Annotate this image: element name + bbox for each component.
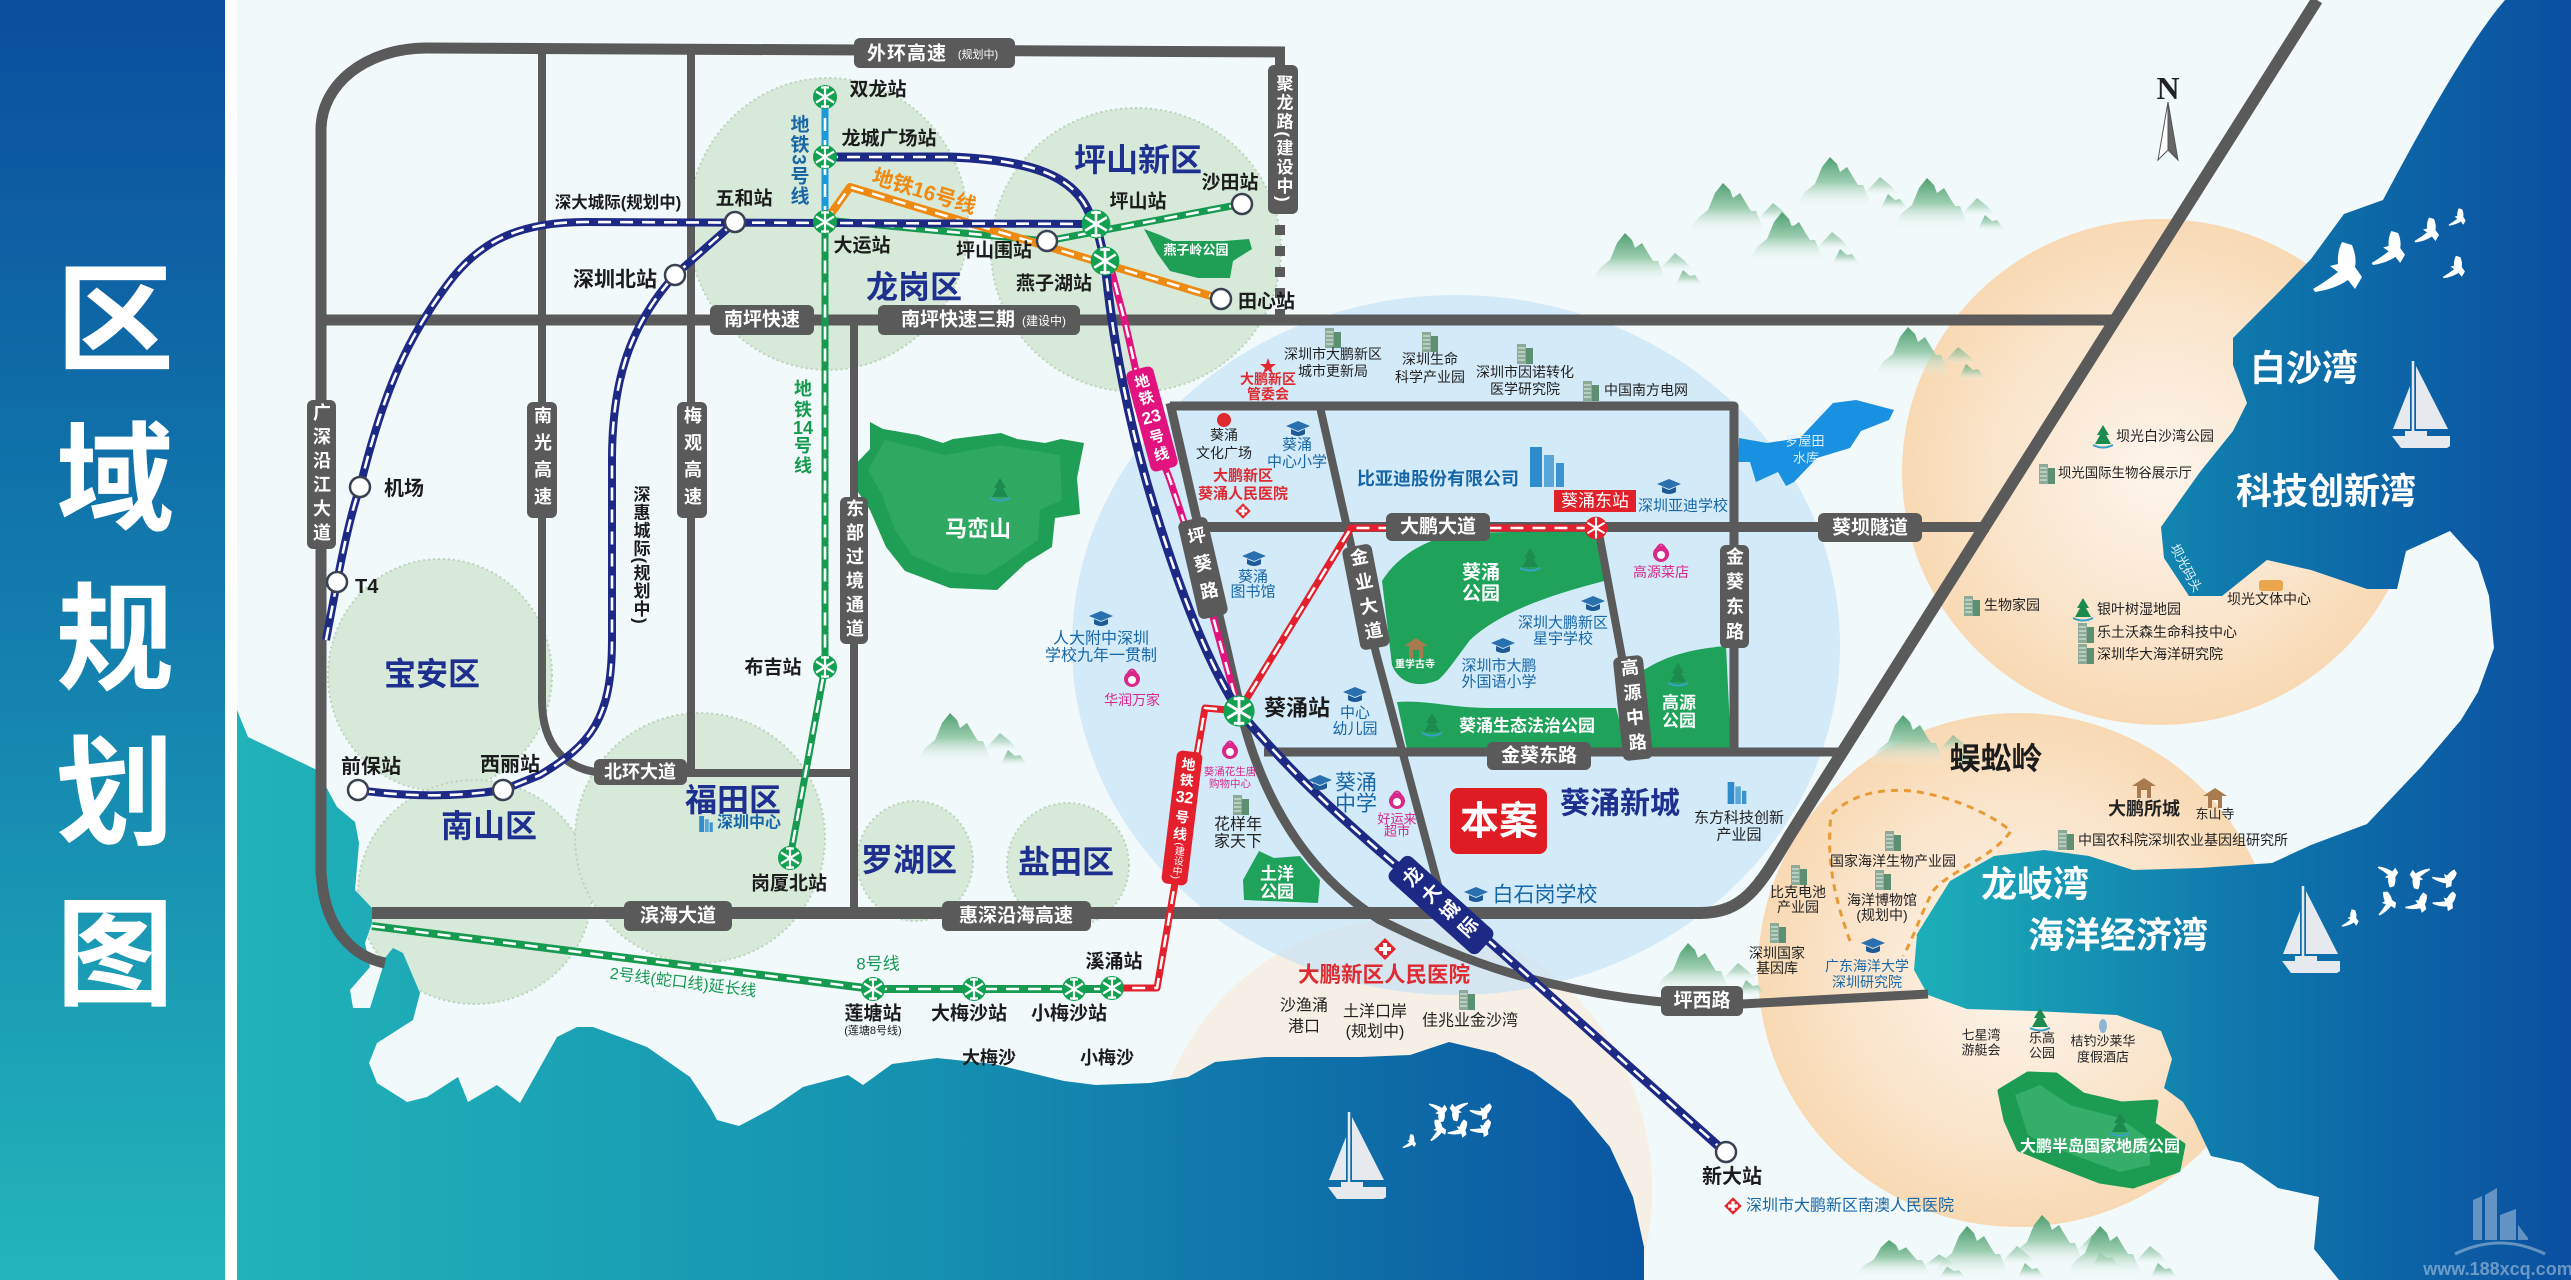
road: 坪葵路 [1177,516,1229,620]
POI: 银叶树湿地园: 银叶树湿地园 [2097,601,2181,617]
POI: 比克电池产业园: 产业园 [1777,899,1819,915]
POI: 坝光国际生物谷展示厅 [2039,464,2192,484]
road: 梅观高速: 梅观高速 [682,406,702,514]
road: 南光高速: 南光高速 [532,406,552,514]
sailboats [1328,361,2450,1199]
station names [341,78,1762,1188]
POI: 大鹏新区人民医院: 大鹏新区人民医院 [1298,962,1470,987]
road: 金葵东路 horizontal: 金葵东路 [1501,744,1577,766]
road network [321,0,2317,1004]
POI: 深圳亚迪学校: 深圳亚迪学校 [1638,498,1728,514]
POI: 乐土沃森生命科技中心: 乐土沃森生命科技中心 [2097,624,2237,640]
district names: 福田区 [685,782,781,818]
badge: 地铁32号线 [1161,750,1203,886]
POI: 管委会: 管委会 [1247,386,1289,402]
POI: 深圳华大海洋研究院 [2078,644,2223,664]
road: 大鹏大道: 大鹏大道 [1400,514,1476,538]
station names: 莲塘站 [844,1002,902,1024]
POI: 东方科技创新产业园 [1694,782,1784,844]
badge: 地铁32号线: 铁 [1179,771,1195,789]
POI: 中国农科院: 中国农科院深圳农业基因组研究所 [2078,832,2288,848]
POI: 乐高公园 [2029,1008,2055,1060]
road: 高源中路: 高源中路 [1618,656,1648,759]
road: 北环大道 [594,759,687,785]
POI: 葵涌中学 [1308,772,1377,816]
callout: 本案 [1450,788,1547,854]
POI: 因诺转化医学研究院 [1476,344,1574,397]
POI: 银叶树湿地园 [2073,598,2181,620]
POI: 沙渔涌港口: 港口 [1288,1018,1320,1036]
POI: 葵涌文化广场 [1196,413,1252,461]
line name: 地铁14号线: 地 [794,379,812,399]
line name: 地铁14号线: 铁 [794,400,812,420]
road: 南坪快速三期: (建设中) [1022,313,1066,328]
callout: 本案: 本案 [1460,800,1538,844]
white strip [225,0,237,1280]
station names: 小梅沙站 [1031,1002,1107,1024]
station names: 坪山围站 [956,240,1032,262]
POI: 高源菜店: 高源菜店 [1633,564,1689,580]
road: 广深沿江大道 [307,400,336,549]
bay titles: 龙岐湾 [1981,864,2089,904]
station names: 溪涌站 [1085,950,1143,972]
road labels [307,38,1922,1016]
POI: 葵涌中心小学 [1267,421,1327,470]
POI: 人大附中: 学校九年一贯制 [1045,646,1157,664]
station names: 田心站 [1238,290,1295,312]
park: 土洋公园 [1243,851,1320,903]
POI: 深圳市大鹏新区城市更新局: 深圳市大鹏新区 [1284,346,1382,362]
district circles [328,78,1281,1004]
POI: 中心幼儿园: 幼儿园 [1332,720,1378,738]
station names: 大梅沙站 [931,1002,1007,1024]
POI: 七星湾游艇会 [1961,1028,2001,1058]
district names: 南山区 [441,808,537,844]
POI: 大鹏所城: 大鹏所城 [2108,798,2180,819]
park: 高源公园: 公园 [1662,712,1696,730]
road: 南光高速 [527,402,557,518]
panel: title banner: 规 [56,575,174,707]
district names: 葵涌新城 [1560,788,1680,820]
line name: 深惠城际: 深惠城际(规划中) [630,485,650,625]
POI: 管委会: 大鹏新区 [1240,371,1296,387]
POI: 人大附中 [1045,611,1157,664]
POI: 深圳生命科学产业园: 深圳生命 [1402,351,1458,367]
station names: 新大站 [1702,1165,1762,1188]
POI: 比亚迪: 比亚迪股份有限公司 [1357,469,1519,489]
POI: 高源菜店 [1633,544,1689,580]
badge: 地铁23号线: 铁 [1137,388,1156,409]
POI: 深圳亚迪学校 [1638,479,1728,514]
POI: 土洋口岸 [1343,1002,1407,1040]
POI: 葵涌中学: 葵涌 [1335,772,1377,794]
park: 燕子岭公园: 燕子岭公园 [1163,242,1229,258]
road: 金葵东路 vertical [1720,545,1749,648]
line: 地铁14号线 [790,204,1242,858]
POI: 南澳人民医院: 深圳市大鹏新区南澳人民医院 [1746,1196,1954,1214]
line name: 深大城际: 深大城际(规划中) [555,192,681,212]
POIs: north row [1045,328,1784,1040]
zone: hospital peach area [1148,920,1652,1280]
reservoir: 罗屋田水库: 罗屋田 [1785,434,1825,448]
watermark [2422,1188,2571,1279]
POI: 深圳国家基因库 [1749,923,1805,976]
POI: 沙渔涌港口 [1280,996,1328,1036]
road: 葵坝隧道: 葵坝隧道 [1832,516,1908,538]
POI: 葵涌图书馆 [1230,551,1276,600]
station names: 西丽站 [480,753,540,776]
station names: 五和站 [715,188,773,210]
sailboat: 白沙湾 [2392,361,2450,448]
reservoir: 罗屋田水库 [1738,400,1894,486]
badge: 地铁23号线: 线 [1152,444,1171,465]
POI: 中心幼儿园: 中心 [1340,704,1370,722]
reservoir: 罗屋田水库: 水库 [1793,450,1819,466]
POI: 中国南方电网 [1583,381,1688,401]
bay titles: 科技创新湾 [2236,470,2416,512]
park: 马峦山: 马峦山 [945,516,1011,542]
compass: north arrow: N [2156,70,2180,106]
park: 高源公园 [1642,646,1731,749]
park: 土洋公园: 公园 [1260,882,1294,902]
park: 马峦山 [851,422,1084,590]
POI: 葵涌人民医院: 葵涌人民医院 [1198,484,1288,502]
POI: 七星湾游艇会: 游艇会 [1961,1042,2001,1058]
district names: 盐田区 [1018,844,1114,880]
line: 地铁23号线 [1109,261,1239,711]
station names: T4 [355,576,379,598]
district names: 罗湖区 [861,842,957,878]
POI: 桔钓沙莱华度假酒店: 桔钓沙莱华 [2070,1034,2136,1048]
POI: 坝光白沙湾公园 [2093,425,2214,448]
road: 坪西路 [1661,986,1743,1016]
POI: 深圳市大鹏新区城市更新局: 城市更新局 [1298,363,1368,379]
line name: 2号线延长线: 2号线(蛇口线)延长线 [609,965,757,1000]
POI: 桔钓沙莱华度假酒店 [2070,1019,2136,1064]
POI: 深圳中心: 深圳中心 [717,814,781,832]
POI: 大鹏新区人民医院 [1298,938,1470,987]
badge: 地铁32号线: 号 [1174,808,1190,826]
dashed boundary: 海洋产业区 [1830,790,2011,956]
POI: 星宇学校: 深圳大鹏新区 [1518,614,1608,632]
POI: 葵涌文化广场: 文化广场 [1196,445,1252,461]
POI: 葵涌图书馆: 图书馆 [1230,584,1276,600]
road: 坪西路: 坪西路 [1673,990,1731,1012]
POI: 比亚迪 [1357,447,1564,489]
label: 坝光码头: 坝光码头 [2167,542,2205,594]
panel: title banner: 图 [56,890,174,1022]
badge: 地铁23号线: 号 [1147,427,1166,448]
road: 葵坝隧道 [1818,513,1922,542]
POI: 葵涌花生唐: 购物中心 [1209,777,1251,790]
POI: 葵涌人民医院 [1198,466,1288,519]
POI: 深圳国家基因库: 深圳国家 [1749,945,1805,961]
line: 龙大城际 [825,157,1725,1152]
POI: 东山寺 [2195,788,2235,822]
road: 金葵东路 horizontal [1487,742,1591,770]
sailboat: south sea [1328,1112,1386,1199]
line name: 地铁14号线: 号 [794,436,812,456]
sea: west and south [237,710,1644,1280]
POI: 外国语小学 [1461,638,1537,690]
road: 外环高速: 外环高速 [867,42,947,64]
sea: east bays [1914,0,2571,1280]
line name: 地铁16号线: 地铁16号线 [869,165,979,219]
station names: 前保站 [341,755,401,778]
station names: 坪山站 [1109,190,1167,212]
POI: 广东海洋大学深圳研究院: 深圳研究院 [1832,974,1902,990]
badge: 地铁23号线 [1125,365,1179,473]
POI: 海洋博物馆: 海洋博物馆 [1847,892,1917,908]
POI: 土洋口岸: 土洋口岸 [1343,1002,1407,1020]
bay titles: 海洋经济湾 [2028,914,2208,956]
panel: title banner: 域 [56,415,174,547]
badge: 龙大城际 [1386,853,1496,957]
panel: title banner [0,0,225,1280]
POI: 花样年家天下 [1214,795,1262,850]
place name: 蜈蚣岭: 蜈蚣岭 [1950,742,2042,776]
POI: 外国语小学: 外国语小学 [1461,674,1537,690]
POI: 坝光文体中心: 坝光文体中心 [2227,591,2311,607]
line: 深大城际 [326,222,1096,640]
station names: 双龙站 [849,78,907,100]
POI: 华润万家 [1104,670,1160,708]
POI: 乐高公园: 公园 [2029,1046,2055,1060]
road: 南坪快速三期 [878,305,1080,335]
park: 大鹏半岛国家地质公园 [2000,1074,2183,1186]
line: 地铁16号线 [825,187,1221,299]
POI: 葵涌中心小学: 中心小学 [1267,454,1327,470]
park: 葵涌公园: 葵涌 [1462,562,1500,584]
POI: 比克电池产业园 [1770,865,1826,915]
road: 惠深沿海高速: 惠深沿海高速 [959,904,1073,926]
line: 深惠城际 [358,222,735,795]
mountains [915,157,2178,1279]
POI: 深圳生命科学产业园: 科学产业园 [1395,369,1465,385]
station names: 布吉站 [744,656,802,678]
POI: 海洋博物馆: (规划中) [1856,907,1908,923]
badge: 地铁32号线: 地 [1181,756,1197,773]
bay titles: 白沙湾 [2250,348,2358,388]
POI: 坝光白沙湾公园: 坝光白沙湾公园 [2116,428,2214,444]
metro station markers [778,85,1607,1001]
POI: 星宇学校: 星宇学校 [1533,630,1593,648]
station names: 沙田站 [1201,172,1259,194]
district names: 宝安区 [384,656,480,692]
road: 聚龙路 [1268,65,1298,214]
road: 广深沿江大道: 广深沿江大道 [311,403,331,547]
POI: 东方科技创新产业园: 产业园 [1716,826,1762,844]
metro badges [1125,365,1496,957]
park: 葵涌公园: 公园 [1462,584,1500,604]
POI: 花样年家天下: 花样年 [1214,816,1262,834]
park: 葵涌生态法治公园 [1397,702,1627,749]
road: 南坪快速三期: 南坪快速三期 [901,308,1015,330]
POI: 白石岗学校: 白石岗学校 [1492,884,1598,906]
district names: 坪山新区 [1074,142,1202,178]
POI: 因诺转化医学研究院: 医学研究院 [1490,381,1560,397]
POI: 好运来超市 [1377,792,1417,838]
road: 外环高速 [854,38,1015,68]
road: 坪葵路: 坪葵路 [1184,525,1222,611]
road: 东部过境通道: 东部过境通道 [844,498,864,643]
POI: 生物家园: 生物家园 [1984,597,2040,613]
POI: 中国南方电网: 中国南方电网 [1604,382,1688,398]
station names: 葵涌站 [1264,696,1330,720]
road: 惠深沿海高速 [942,901,1091,931]
line: 地铁3号线 [822,96,828,222]
POI: 葵涌文化广场: 葵涌 [1210,427,1238,443]
station names: 燕子湖站 [1016,272,1092,294]
park: 大鹏半岛国家地质公园: 大鹏半岛国家地质公园 [2020,1136,2180,1156]
station names: 岗厦北站 [751,872,827,894]
POI: 国家海洋生物产业园 [1830,831,1956,869]
zone: Longqi Bay peach circle [1758,713,2278,1227]
park: 葵涌公园 [1382,530,1604,684]
line: 地铁32号线 [1112,708,1239,988]
POI: 生物家园 [1964,596,2040,616]
POI: 深圳国家基因库: 基因库 [1756,960,1798,976]
park: 葵涌公园: 重学古寺 [1395,658,1435,670]
road: 南坪快速: 南坪快速 [724,308,800,330]
POI: 因诺转化医学研究院: 深圳市因诺转化 [1476,364,1574,380]
park: 葵涌生态法治公园: 葵涌生态法治公园 [1459,716,1595,736]
road: 滨海大道: 滨海大道 [640,904,716,926]
station names: 大运站 [833,234,891,256]
badge: 地铁32号线: (建设中) [1169,842,1185,880]
line name: 地铁14号线: 14 [793,418,813,438]
POI: 国家海洋生物产业园: 国家海洋生物产业园 [1830,853,1956,869]
road: 金业大道: 金业大道 [1346,545,1385,648]
watermark: www.188xcq.com [2422,1259,2571,1279]
station tag: 葵涌东站: 葵涌东站 [1561,492,1629,510]
station names: 大梅沙 [962,1048,1016,1068]
POI: 外国语小学: 深圳市大鹏 [1461,658,1537,674]
POI: 葵涌花生唐: 葵涌花生唐 [1204,765,1256,778]
metro lines [326,96,1725,1152]
compass: north arrow [2156,70,2180,160]
park: 燕子岭公园 [1144,229,1252,278]
POI: 深圳生命科学产业园 [1395,332,1465,385]
zone: Baisha Bay peach circle [1902,219,2418,725]
POI: 东方科技创新产业园: 东方科技创新 [1694,810,1784,826]
POI: 葵涌图书馆: 葵涌 [1238,568,1268,586]
birds [1402,208,2466,1148]
panel: title banner: 区 [56,256,174,388]
station names: 龙城广场站 [841,128,937,150]
road: 滨海大道 [624,901,732,931]
white transfer stations [327,194,1736,1162]
POI: 广东海洋大学深圳研究院: 广东海洋大学 [1825,958,1909,974]
POIs: Baisha Bay [1964,425,2311,664]
POI: 花样年家天下: 家天下 [1214,832,1262,850]
road: 大鹏大道 [1386,513,1490,541]
badge: 地铁32号线: 32 [1175,789,1194,808]
POI: 好运来超市: 好运来 [1377,812,1417,826]
road: 东部过境通道 [840,497,868,644]
POI: 葵涌中心小学: 葵涌 [1282,436,1312,454]
road: 外环高速: (规划中) [958,47,998,61]
POI: 深圳市大鹏新区城市更新局 [1284,328,1382,379]
line name: 地铁14号线 [793,379,813,476]
sailboat: 海洋经济湾 [2282,886,2340,973]
line name: 地铁14号线: 线 [794,456,812,476]
POI: 乐高公园: 乐高 [2029,1030,2055,1046]
POI: 东山寺: 东山寺 [2195,806,2235,822]
district names: 龙岗区 [866,269,962,305]
POI: 佳兆业金沙湾: 佳兆业金沙湾 [1422,1012,1518,1030]
road: 梅观高速 [677,402,707,518]
district names [384,142,1680,880]
POI: 葵涌花生唐 [1204,742,1256,790]
POI: 管委会 [1240,358,1296,402]
POI: 七星湾游艇会: 七星湾 [1961,1028,2001,1042]
POI: 海洋博物馆 [1847,870,1917,923]
POI: 土洋口岸: (规划中) [1346,1022,1404,1040]
road: 南坪快速 [710,305,814,335]
POI: 人大附中: 人大附中深圳 [1053,630,1149,648]
POI: 坝光国际生物谷展示厅: 坝光国际生物谷展示厅 [2058,466,2192,480]
road: 聚龙路: 聚龙路(建设中) [1274,74,1293,204]
badge: 地铁32号线: 线 [1172,825,1188,843]
station names: 小梅沙 [1080,1048,1134,1068]
POI: 桔钓沙莱华度假酒店: 度假酒店 [2077,1050,2129,1064]
badge: 地铁23号线: 23 [1140,405,1163,429]
road: 北环大道: 北环大道 [604,761,676,782]
POI: 坝光文体中心 [2227,580,2311,607]
station names: 机场 [384,477,424,500]
POIs: Longqi Bay [1724,742,2288,1215]
POI: 比克电池产业园: 比克电池 [1770,884,1826,900]
badge: 地铁23号线: 地 [1133,372,1152,392]
POI: 沙渔涌港口: 沙渔涌 [1280,996,1328,1014]
POI: 华润万家: 华润万家 [1104,692,1160,708]
park: 土洋公园: 土洋 [1260,864,1294,884]
zone: pale blue Kuichong circle [1072,295,1840,995]
badge: 龙大城际: 龙大城际 [1397,863,1486,946]
POI: 佳兆业金沙湾 [1422,990,1518,1030]
station names: 深圳北站 [573,268,657,292]
POI: 好运来超市: 超市 [1384,824,1410,838]
line name: 地铁3号线: 地铁3号线 [788,114,809,206]
line name: 8号线: 8号线 [856,954,900,974]
road: 金葵东路 vertical: 金葵东路 [1724,546,1744,647]
bay titles [1981,348,2416,956]
line: 葵涌东站支线 [1239,528,1596,711]
POI: 葵涌人民医院: 大鹏新区 [1213,466,1273,484]
POI: 广东海洋大学深圳研究院 [1825,938,1909,990]
line: 地铁2号线延长线 [372,926,1112,989]
park: 高源公园: 高源 [1662,692,1696,712]
panel: title banner: 划 [56,729,174,861]
POI: 葵涌中学: 中学 [1335,792,1377,816]
POI: 大鹏所城 [2108,778,2180,819]
POI: 星宇学校 [1518,596,1608,648]
POI: 中心幼儿园 [1332,687,1378,738]
station names: (莲塘8号线) [844,1023,902,1037]
POI: 深圳华大海洋研究院: 深圳华大海洋研究院 [2097,646,2223,662]
